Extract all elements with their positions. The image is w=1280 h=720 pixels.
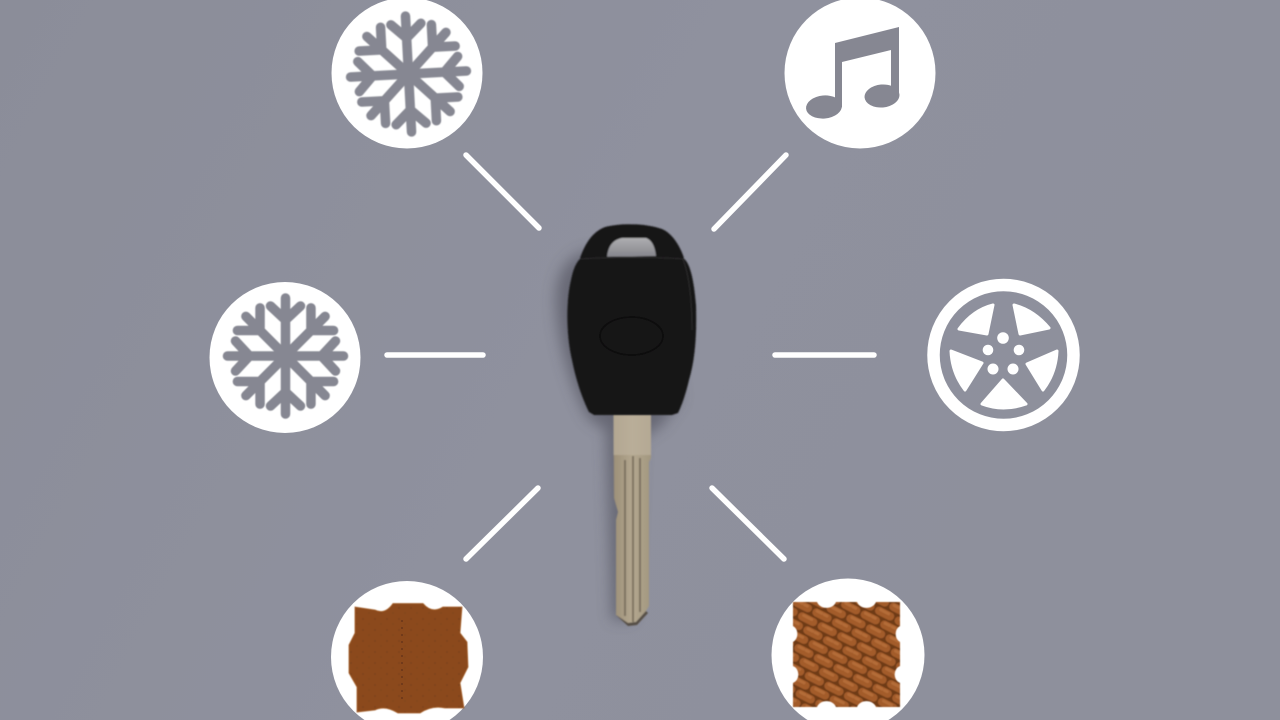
connector: top left — [466, 155, 539, 228]
icon: alloy wheel — [934, 285, 1074, 425]
connector: left — [387, 352, 483, 358]
connector: top right — [714, 155, 786, 229]
connector: right — [775, 352, 874, 358]
car key — [556, 224, 696, 626]
connector: bottom right — [712, 488, 784, 559]
icon: music note — [784, 0, 936, 148]
icon: smooth leather swatch — [331, 581, 483, 720]
key fob body — [567, 224, 696, 415]
connector: bottom left — [466, 488, 538, 559]
key shadow — [556, 250, 680, 620]
icon: snowflake left — [210, 282, 360, 433]
icon: woven leather swatch — [772, 578, 924, 720]
icon: snowflake top left — [332, 0, 482, 148]
key blade — [614, 414, 651, 626]
